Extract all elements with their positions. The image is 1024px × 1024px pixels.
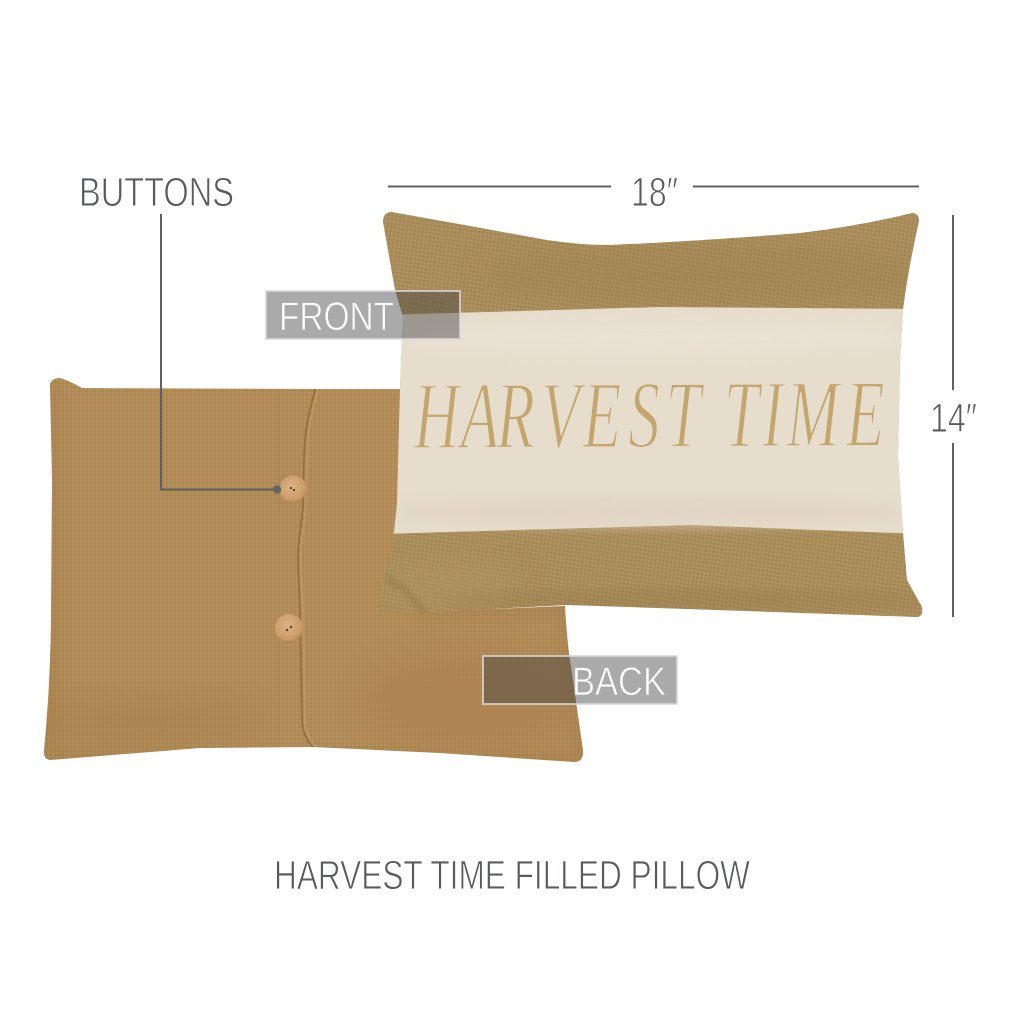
- arrow: buttons leader line: [161, 214, 281, 494]
- icon: button lower: [275, 614, 303, 642]
- dimension: width 18 inches: 18″: [631, 169, 678, 215]
- badge: back: [483, 656, 677, 704]
- icon: button upper: [280, 476, 306, 502]
- title: HARVEST TIME FILLED PILLOW: [274, 852, 750, 898]
- badge: back: BACK: [572, 660, 666, 704]
- front pillow: [370, 205, 930, 625]
- fold at lower left corner: [388, 578, 424, 610]
- embroidered text: harvest time: HARVEST TIME: [413, 361, 885, 469]
- dimension: height 14 inches: 14″: [930, 395, 977, 441]
- badge: front: [266, 291, 460, 339]
- infographic canvas: [44, 178, 976, 889]
- callout: buttons label: BUTTONS: [79, 169, 234, 215]
- cream centre band: [380, 307, 920, 534]
- back pillow: [40, 370, 590, 770]
- badge: front: FRONT: [279, 295, 394, 339]
